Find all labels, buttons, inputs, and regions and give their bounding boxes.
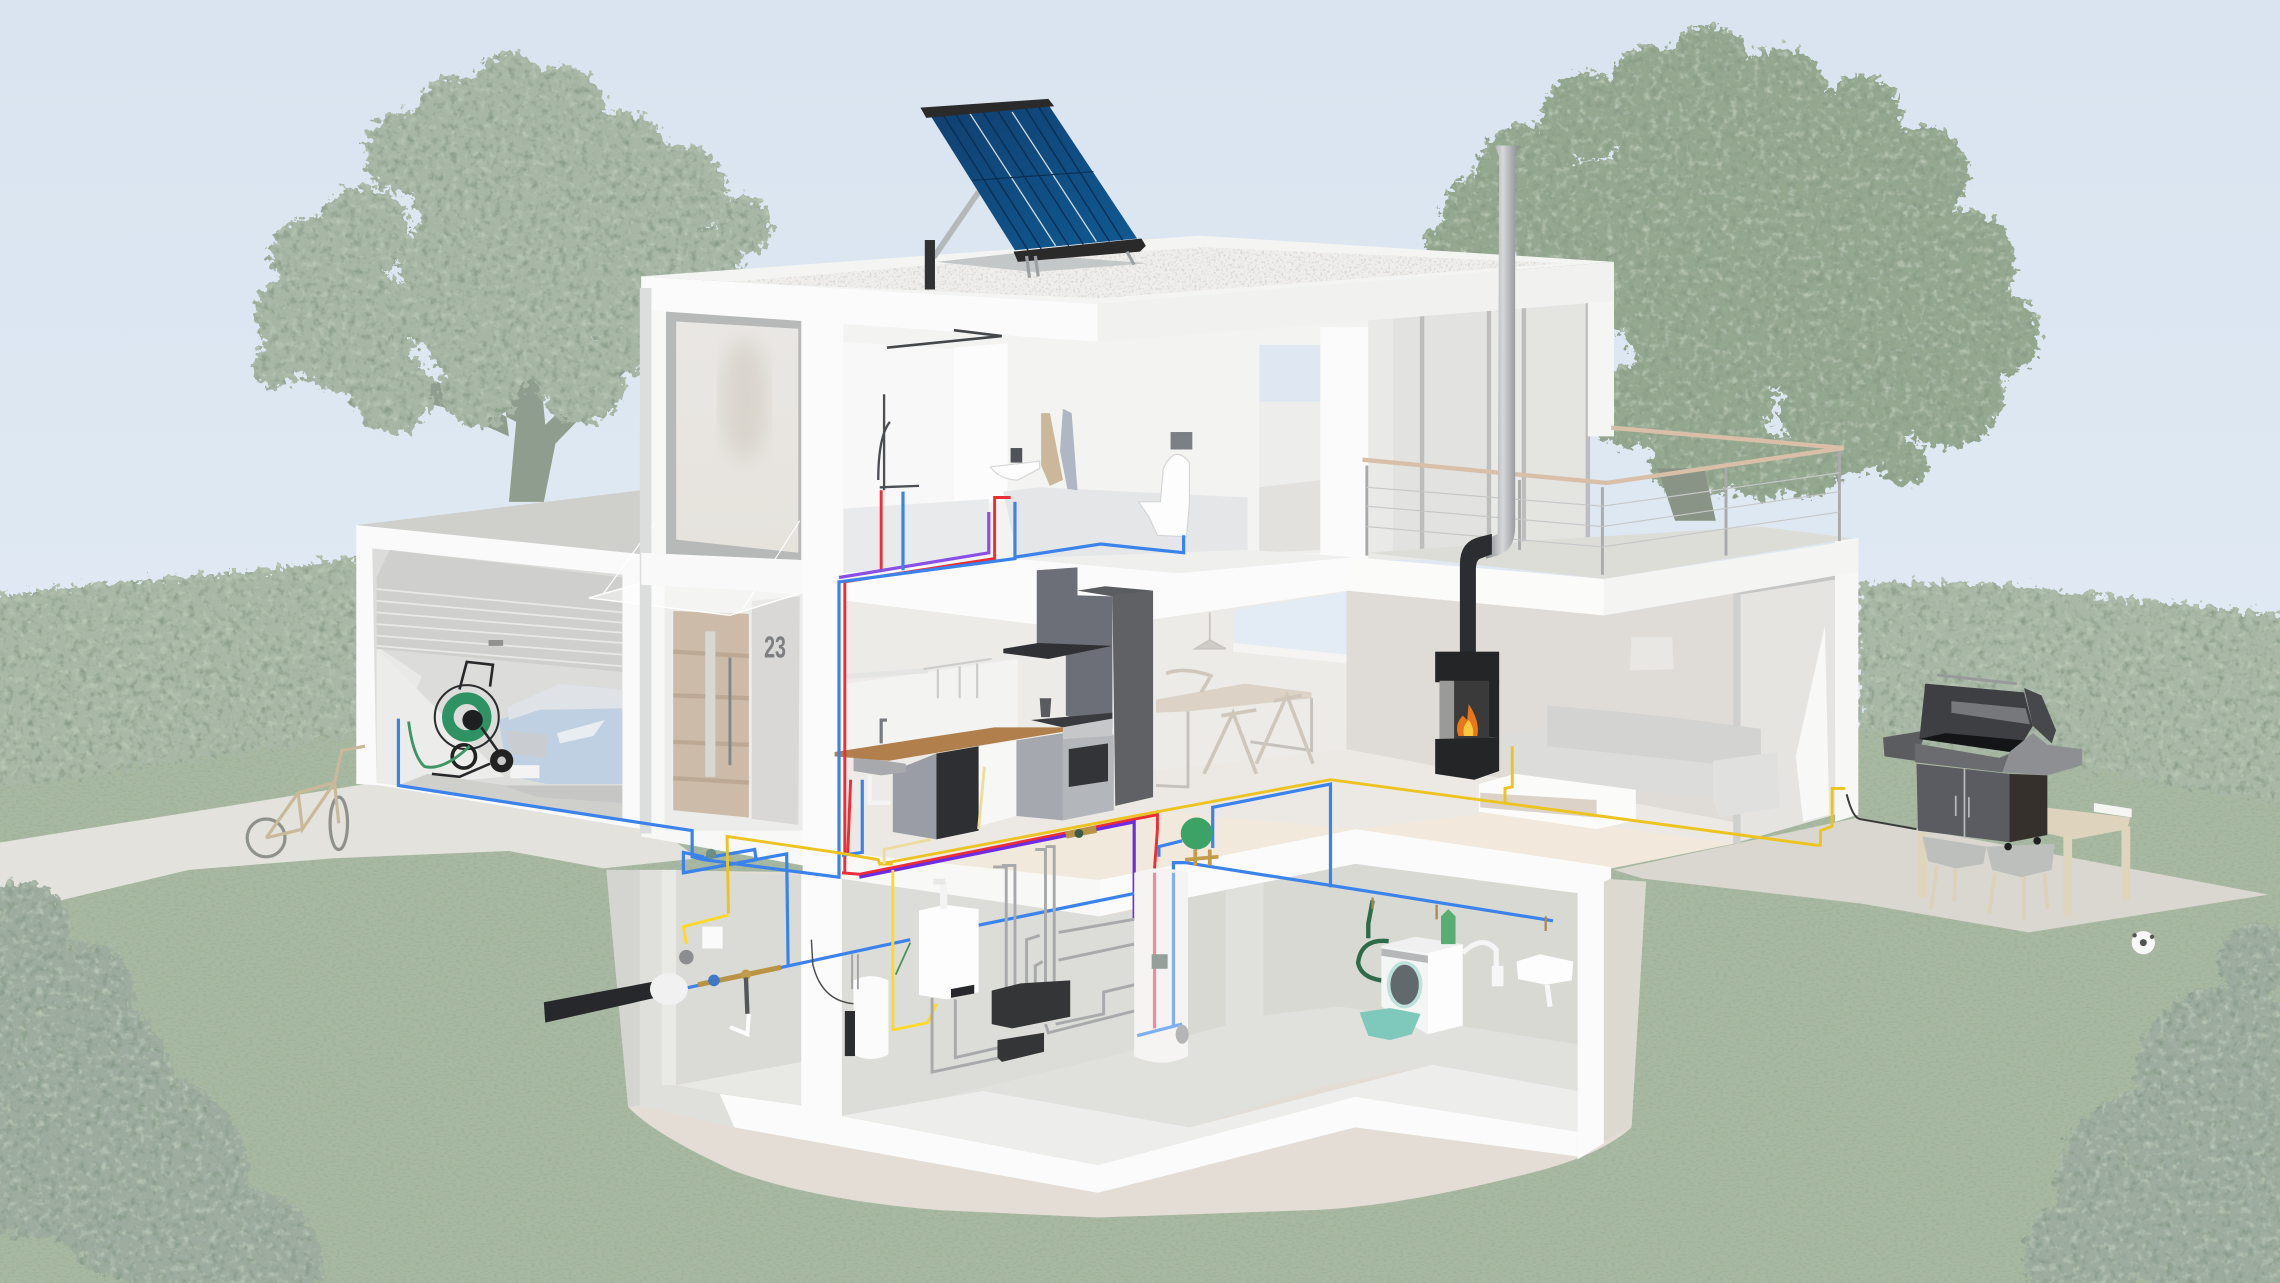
floor	[840, 749, 1733, 880]
driveway valve cluster	[706, 849, 716, 859]
grate	[1919, 733, 2024, 752]
basement slab front	[734, 1097, 1578, 1193]
hedge: right	[1858, 582, 2280, 810]
dining window	[1233, 592, 1346, 655]
terrace paving	[1614, 818, 2268, 932]
ground floor: room	[840, 538, 1858, 880]
towels	[1041, 413, 1063, 486]
chair seats	[1922, 836, 2055, 877]
glass door	[1733, 577, 1835, 844]
trap	[870, 775, 890, 803]
laundry basket	[1360, 1008, 1421, 1040]
icon: small water heater	[845, 954, 888, 1059]
basement appliances	[1358, 898, 1573, 1040]
washbasin	[990, 461, 1040, 480]
pipe: red hot water	[842, 490, 1159, 1028]
upper right room	[1368, 295, 1588, 560]
bathroom wall	[829, 316, 1368, 579]
wood door	[673, 611, 749, 818]
water connection fittings	[544, 829, 1096, 1034]
kitchen wall	[843, 582, 1346, 815]
balcony deck	[1367, 527, 1854, 579]
kitchen	[835, 567, 1153, 839]
coffee table	[1479, 774, 1636, 829]
cabinet front	[1916, 764, 2010, 842]
balcony edge	[1604, 540, 1858, 615]
kitchen shelf	[846, 671, 928, 676]
range hood	[1037, 567, 1077, 649]
garage frame	[356, 525, 641, 829]
roof	[641, 236, 1614, 342]
dining chairs	[1166, 670, 1313, 774]
door surround	[665, 580, 803, 831]
wheels	[2004, 843, 2012, 850]
sink bowl	[854, 756, 906, 775]
washing machine	[1381, 946, 1428, 1034]
left room wall	[676, 870, 801, 1085]
lid handle	[1937, 675, 2017, 684]
tree: left	[253, 52, 771, 502]
roof top	[641, 236, 1614, 304]
garage	[356, 490, 641, 829]
green hose	[896, 943, 910, 975]
table legs	[1922, 826, 2126, 916]
icon: soccer ball	[2132, 931, 2155, 954]
chimney flue	[1460, 145, 1520, 658]
upper window	[666, 311, 801, 560]
slab right band	[1346, 557, 1604, 615]
water inlet pipe	[544, 980, 662, 1023]
glass canopy	[589, 582, 800, 615]
icon: expansion vessel	[1181, 818, 1219, 866]
valves on main	[1066, 829, 1096, 835]
oven	[1063, 735, 1114, 820]
hedge: left	[0, 556, 364, 793]
cabinet side	[2010, 774, 2047, 842]
bath tub surround	[836, 499, 989, 576]
shower set	[878, 394, 919, 490]
pipe brackets	[1373, 898, 1546, 931]
house: entrance	[589, 521, 803, 831]
roof left fascia	[641, 276, 1098, 342]
lawn: base	[0, 727, 2280, 1283]
floor lamp	[1630, 637, 1674, 671]
dining set	[1156, 612, 1313, 787]
garage roof	[356, 490, 641, 554]
car shadow	[503, 786, 622, 803]
fridge back	[1066, 595, 1112, 727]
curved lamp	[1745, 618, 1793, 807]
garage interior	[372, 548, 622, 819]
slab: first floor	[641, 527, 1858, 633]
roof right fascia	[1098, 262, 1614, 342]
grill hose	[1847, 794, 1916, 829]
end wall	[1835, 538, 1858, 822]
main room left wall	[840, 876, 1188, 1116]
left facade	[641, 276, 843, 873]
chair legs	[1931, 866, 2047, 919]
door handles	[1956, 768, 1969, 838]
pipe: yellow gas	[683, 746, 1845, 1030]
fridge top	[1077, 586, 1153, 596]
moka pot	[1040, 698, 1051, 717]
canopy wires	[603, 521, 800, 611]
basement dividing column	[801, 873, 842, 1120]
lid interior	[1919, 684, 2033, 740]
icon: hose reel	[409, 662, 513, 777]
counter top	[835, 727, 1063, 761]
table top	[2044, 807, 2130, 839]
flue silver section	[1486, 145, 1520, 559]
white chair back	[2094, 803, 2132, 818]
right shelf	[2002, 733, 2082, 775]
bush: lower left	[0, 882, 323, 1283]
filter to trap	[746, 978, 747, 1014]
icon: bicycle	[247, 746, 365, 857]
balcony railing	[1362, 428, 1844, 575]
gas meter	[702, 927, 723, 948]
bathroom fixtures	[878, 330, 1192, 537]
living room wall	[1346, 589, 1733, 822]
sofa	[1502, 706, 1780, 818]
flue black section	[1460, 534, 1492, 658]
slab top and front	[842, 557, 1355, 633]
basement	[606, 829, 1646, 1193]
house number: 23	[764, 630, 786, 665]
shower rod	[887, 330, 1002, 348]
patio furniture	[1922, 803, 2132, 919]
icon: gas grill	[1847, 675, 2082, 850]
main room right wall	[1188, 864, 1578, 1044]
icon: boiler	[919, 882, 979, 999]
dishwasher	[893, 754, 936, 839]
tree: right	[1424, 26, 2040, 521]
bathroom floor	[1013, 550, 1355, 573]
utility sink	[1517, 954, 1573, 985]
lid side	[2024, 688, 2056, 743]
left concrete side	[606, 870, 640, 1107]
left slab edge	[840, 852, 1099, 916]
tile wall	[846, 659, 1018, 756]
roof gravel	[727, 247, 1563, 298]
utensil rail	[923, 659, 992, 698]
bush: lower right	[2024, 922, 2280, 1283]
basement right wall	[1578, 867, 1604, 1159]
hose hanging	[1358, 900, 1389, 980]
slab left band	[641, 553, 803, 593]
tree trunk: right	[1658, 468, 1716, 521]
tap	[881, 720, 887, 743]
shower niche	[843, 342, 954, 541]
dining table	[1156, 684, 1312, 713]
marble tile	[1003, 487, 1248, 560]
toilet	[1139, 454, 1189, 537]
pendant lamp	[1195, 612, 1226, 649]
left shelf	[1883, 730, 1927, 761]
garage door	[377, 550, 622, 672]
main column	[803, 317, 843, 877]
right end wall	[1588, 284, 1614, 436]
control panel	[1915, 743, 2010, 772]
right slab edge	[1099, 829, 1611, 916]
left room slab	[720, 1094, 840, 1135]
garage floor	[398, 774, 622, 819]
basement light floor	[842, 1065, 1578, 1165]
grey cabinet	[1016, 733, 1063, 820]
fridge	[1112, 591, 1153, 806]
flush plate	[1171, 432, 1192, 449]
wall sleeve	[650, 973, 688, 1005]
faucet hose	[1463, 943, 1496, 967]
roof vent pipe	[925, 240, 935, 289]
regulator	[679, 950, 694, 964]
icon: stove	[1435, 652, 1499, 780]
pipe: blue cold water	[398, 492, 1553, 1036]
house: upper storey	[641, 276, 1614, 873]
water meter group	[698, 967, 781, 985]
car	[499, 684, 622, 784]
icon: solar collector	[920, 99, 1147, 278]
grey heating pipes	[932, 847, 1134, 1072]
icon: manifold	[992, 980, 1070, 1062]
basement dark floor	[939, 1007, 1578, 1132]
excavation soil	[606, 870, 1646, 1218]
door wall	[1320, 327, 1368, 560]
bedroom doorway	[1259, 345, 1320, 553]
shower curtain	[954, 343, 1008, 506]
pipe: purple circulation	[839, 512, 1165, 921]
detergent bottle	[1441, 909, 1456, 944]
right concrete side	[1602, 879, 1646, 1142]
side panel	[752, 596, 800, 825]
drainpipe	[640, 288, 651, 834]
white cabinet	[979, 740, 1016, 826]
icon: storage tank	[1134, 868, 1189, 1063]
driveway	[0, 783, 698, 916]
socket and cable	[811, 940, 854, 1004]
